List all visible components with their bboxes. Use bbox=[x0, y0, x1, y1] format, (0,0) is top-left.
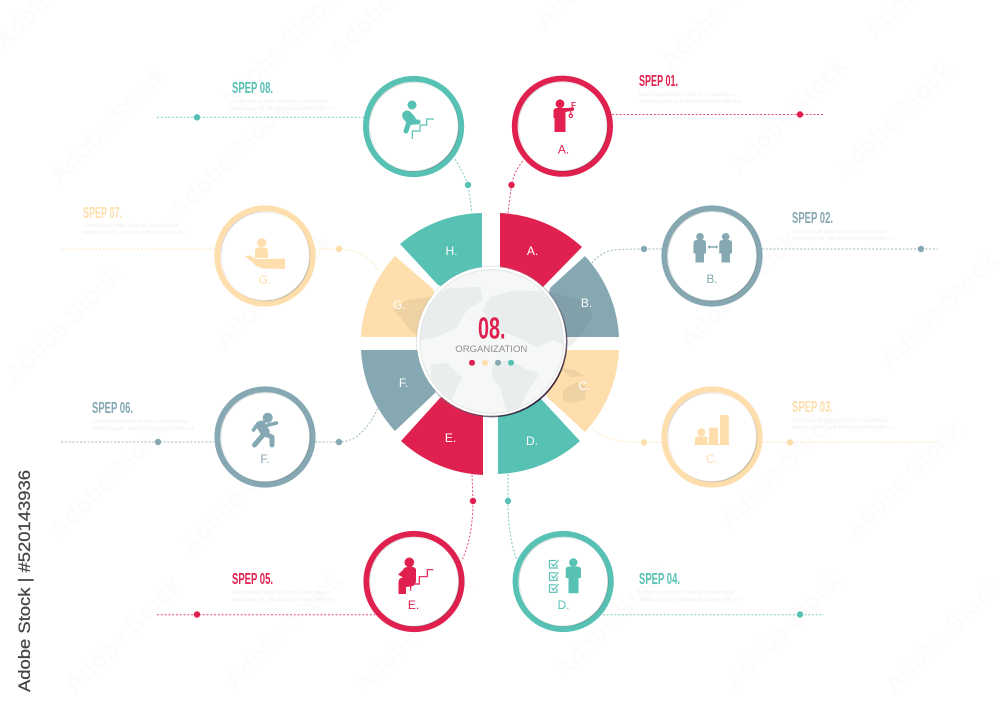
watermark pattern: Adobe Stock bbox=[714, 406, 842, 534]
icon: seated person and stairs bbox=[398, 558, 433, 594]
icon: person and bars bbox=[694, 415, 730, 445]
icon: running person bbox=[254, 413, 276, 445]
step 04 text: adipiscing elit, sed diam nonummy nibh eui bbox=[639, 597, 741, 603]
watermark pattern: Adobe Stock bbox=[59, 571, 187, 699]
icon: person with key: F bbox=[571, 101, 576, 110]
watermark pattern: Adobe Stock bbox=[209, 226, 337, 354]
step 03 text bbox=[792, 399, 894, 431]
circle G bbox=[214, 205, 316, 307]
step 05 text: Lorem ipsum dolor sit amet, consectetuer bbox=[232, 590, 328, 596]
center number: 08. bbox=[478, 310, 506, 346]
label: G. bbox=[259, 273, 271, 287]
label: E. bbox=[408, 598, 419, 612]
step 04 text: SPEP 04. bbox=[639, 571, 680, 588]
connector dots bbox=[155, 111, 924, 618]
segment E bbox=[401, 380, 483, 475]
world map inside disc bbox=[420, 287, 563, 411]
label: D. bbox=[558, 598, 570, 612]
segment letters: G. bbox=[393, 298, 406, 312]
segment A bbox=[500, 213, 582, 300]
step 01 text: Lorem ipsum dolor sit amet, consectetuer bbox=[639, 92, 735, 98]
watermark pattern: Adobe Stock bbox=[719, 566, 847, 694]
step 08 text: Lorem ipsum dolor sit amet, consectetuer bbox=[232, 99, 328, 105]
watermark pattern: Adobe Stock bbox=[44, 416, 172, 544]
segment F bbox=[361, 350, 440, 431]
circle B bbox=[661, 205, 763, 307]
step 07 text: SPEP 07. bbox=[83, 205, 122, 222]
segment D bbox=[498, 380, 580, 474]
segment letters: F. bbox=[399, 376, 408, 390]
label: A. bbox=[558, 142, 569, 156]
label: F. bbox=[260, 452, 270, 466]
step 07 text bbox=[83, 205, 185, 236]
watermark pattern: Adobe Stock bbox=[829, 56, 957, 184]
step 08 text bbox=[232, 80, 334, 112]
step 04 text: Lorem ipsum dolor sit amet, consectetuer bbox=[639, 590, 735, 596]
step 03 text: adipiscing elit, sed diam nonummy nibh eui bbox=[792, 425, 894, 431]
circle A bbox=[512, 76, 613, 177]
segment letters: C. bbox=[578, 379, 590, 393]
watermark pattern: Adobe Stock bbox=[839, 416, 967, 544]
step 07 text: Lorem ipsum dolor sit amet, consectetuer bbox=[83, 223, 179, 229]
step 03 text: Lorem ipsum dolor sit amet, consectetuer bbox=[792, 418, 888, 424]
center color dots bbox=[469, 360, 514, 366]
segment letters: E. bbox=[445, 431, 456, 445]
segment letters: D. bbox=[526, 434, 538, 448]
step 02 text: Lorem ipsum dolor sit amet, consectetuer bbox=[792, 229, 888, 235]
circle F bbox=[214, 386, 316, 488]
circle C bbox=[661, 386, 763, 488]
segment letters: A. bbox=[527, 244, 538, 258]
watermark pattern: Adobe Stock bbox=[0, 261, 127, 389]
icon: person climbing stairs bbox=[406, 100, 434, 139]
icon: hand holding person bbox=[245, 238, 285, 269]
label: B. bbox=[706, 272, 718, 286]
step 07 text: adipiscing elit, sed diam nonummy nibh eui bbox=[83, 230, 185, 236]
watermark pattern: Adobe Stock bbox=[219, 566, 347, 694]
circle D bbox=[513, 531, 614, 632]
stock id side text: Adobe Stock | #520143936 bbox=[15, 470, 34, 692]
watermark pattern: Adobe Stock bbox=[674, 226, 802, 354]
watermark pattern: Adobe Stock bbox=[874, 246, 1000, 374]
center disc bbox=[416, 266, 568, 417]
world map over segments bbox=[393, 287, 592, 413]
icon: checklist and person bbox=[550, 558, 581, 593]
connector lines bbox=[61, 114, 938, 615]
watermark pattern: Adobe Stock bbox=[174, 431, 302, 559]
label: C. bbox=[706, 452, 718, 466]
step 04 text bbox=[639, 571, 741, 603]
watermark pattern: Adobe Stock bbox=[724, 51, 852, 179]
central donut chart bbox=[361, 213, 619, 475]
segment G bbox=[361, 256, 445, 337]
watermark pattern: Adobe Stock bbox=[164, 96, 292, 224]
step 03 text: SPEP 03. bbox=[792, 399, 833, 416]
step 05 text bbox=[232, 571, 334, 603]
step 02 text bbox=[792, 210, 894, 242]
step 06 text: Lorem ipsum dolor sit amet, consectetuer bbox=[92, 419, 188, 425]
step 08 text: adipiscing elit, sed diam nonummy nibh eui bbox=[232, 106, 334, 112]
step 05 text: adipiscing elit, sed diam nonummy nibh eui bbox=[232, 597, 334, 603]
step 06 text: SPEP 06. bbox=[92, 400, 133, 417]
watermark pattern: Adobe Stock bbox=[44, 61, 172, 189]
step 05 text: SPEP 05. bbox=[232, 571, 273, 588]
segment C bbox=[540, 350, 619, 432]
step 06 text bbox=[92, 400, 194, 432]
icon: two people exchanging bbox=[694, 233, 732, 262]
step 01 text: SPEP 01. bbox=[639, 73, 678, 90]
watermark pattern: Adobe Stock bbox=[549, 556, 677, 684]
step 02 text: SPEP 02. bbox=[792, 210, 833, 227]
center label: ORGANIZATION bbox=[455, 344, 527, 355]
step 06 text: adipiscing elit, sed diam nonummy nibh eui bbox=[92, 426, 194, 432]
circle E bbox=[363, 531, 465, 632]
circle H bbox=[363, 76, 464, 177]
segment H bbox=[400, 213, 482, 300]
step 02 text: adipiscing elit, sed diam nonummy nibh eui bbox=[792, 236, 894, 242]
step 01 text bbox=[639, 73, 741, 105]
step 08 text: SPEP 08. bbox=[232, 80, 273, 97]
step 01 text: adipiscing elit, sed diam nonummy nibh eui bbox=[639, 99, 741, 105]
segment B bbox=[540, 256, 619, 337]
segment letters: H. bbox=[446, 244, 458, 258]
segment letters: B. bbox=[581, 296, 592, 310]
segment letters bbox=[393, 244, 592, 448]
watermark pattern: Adobe Stock bbox=[349, 571, 477, 699]
